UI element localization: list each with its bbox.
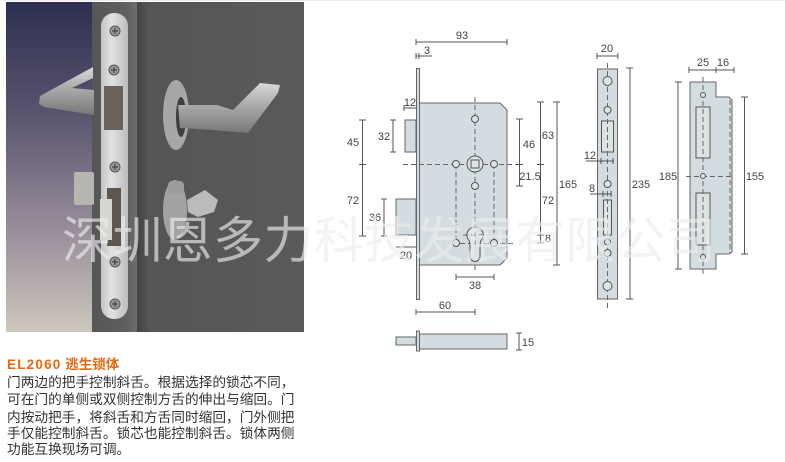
icon: outer handle xyxy=(163,80,280,150)
drawing: lock side view xyxy=(396,331,534,351)
dimensions: 8 xyxy=(545,233,551,245)
dimensions: 36 xyxy=(369,212,381,224)
description text xyxy=(7,375,295,457)
watermark: 深圳恩多力科技发展有限公司 xyxy=(62,213,716,269)
top edge strip xyxy=(0,0,785,1)
dimensions: 72 xyxy=(542,195,554,207)
drawing: mortise lock front view xyxy=(347,30,577,315)
icon: faceplate xyxy=(100,13,128,319)
dimensions: 32 xyxy=(378,131,390,143)
centre lines xyxy=(403,97,520,270)
description text: 功能互换现场可调。 xyxy=(7,441,130,457)
dimensions: 12 xyxy=(404,97,416,109)
dimensions: 3 xyxy=(424,45,430,57)
description text: 手仅能控制斜舌。锁芯也能控制斜舌。锁体两侧 xyxy=(7,426,294,441)
icon: deadbolt xyxy=(74,172,94,205)
dimensions: 46 xyxy=(523,139,535,151)
drawing: forend plate: 8 xyxy=(589,183,595,195)
heading: EL2060 逃生锁体 xyxy=(7,356,120,372)
dimensions: 93 xyxy=(456,30,468,42)
dimensions: 45 xyxy=(347,137,359,149)
dimensions: 72 xyxy=(347,195,359,207)
dimensions: 21.5 xyxy=(519,171,541,183)
drawing: strike plate: 16 xyxy=(717,57,729,69)
lock case xyxy=(420,103,507,265)
latch bolt xyxy=(405,120,416,152)
description text: 内按动把手，将斜舌和方舌同时缩回，门外侧把 xyxy=(7,410,295,425)
drawing: forend plate: 235 xyxy=(632,179,650,191)
holes and follower xyxy=(452,116,498,262)
drawing: forend plate: 12 xyxy=(584,150,596,162)
dimensions: 20 xyxy=(400,250,412,262)
forend plate xyxy=(416,68,420,300)
description text: 门两边的把手控制斜舌。根据选择的锁芯不同， xyxy=(7,375,294,390)
dimensions: 60 xyxy=(439,300,451,312)
photo: lock installed on door xyxy=(6,2,304,332)
drawing: forend plate xyxy=(584,43,650,308)
dead bolt xyxy=(396,199,416,235)
icon: cylinder and key xyxy=(163,180,218,240)
drawing: forend plate: 20 xyxy=(601,43,613,55)
icon: inner handle xyxy=(39,67,94,115)
drawing: strike plate xyxy=(659,57,764,277)
dimensions xyxy=(347,30,577,315)
dimensions: 165 xyxy=(559,179,577,191)
dimensions: 38 xyxy=(469,280,481,292)
description text: 可在门的单侧或双侧控制方舌的伸出与缩回。门 xyxy=(7,392,294,407)
drawing: strike plate: 185 xyxy=(659,171,677,183)
drawing: lock side view: 15 xyxy=(522,337,534,349)
drawing: strike plate: 25 xyxy=(697,57,709,69)
dimensions: 63 xyxy=(542,130,554,142)
drawing: strike plate: 155 xyxy=(746,171,764,183)
